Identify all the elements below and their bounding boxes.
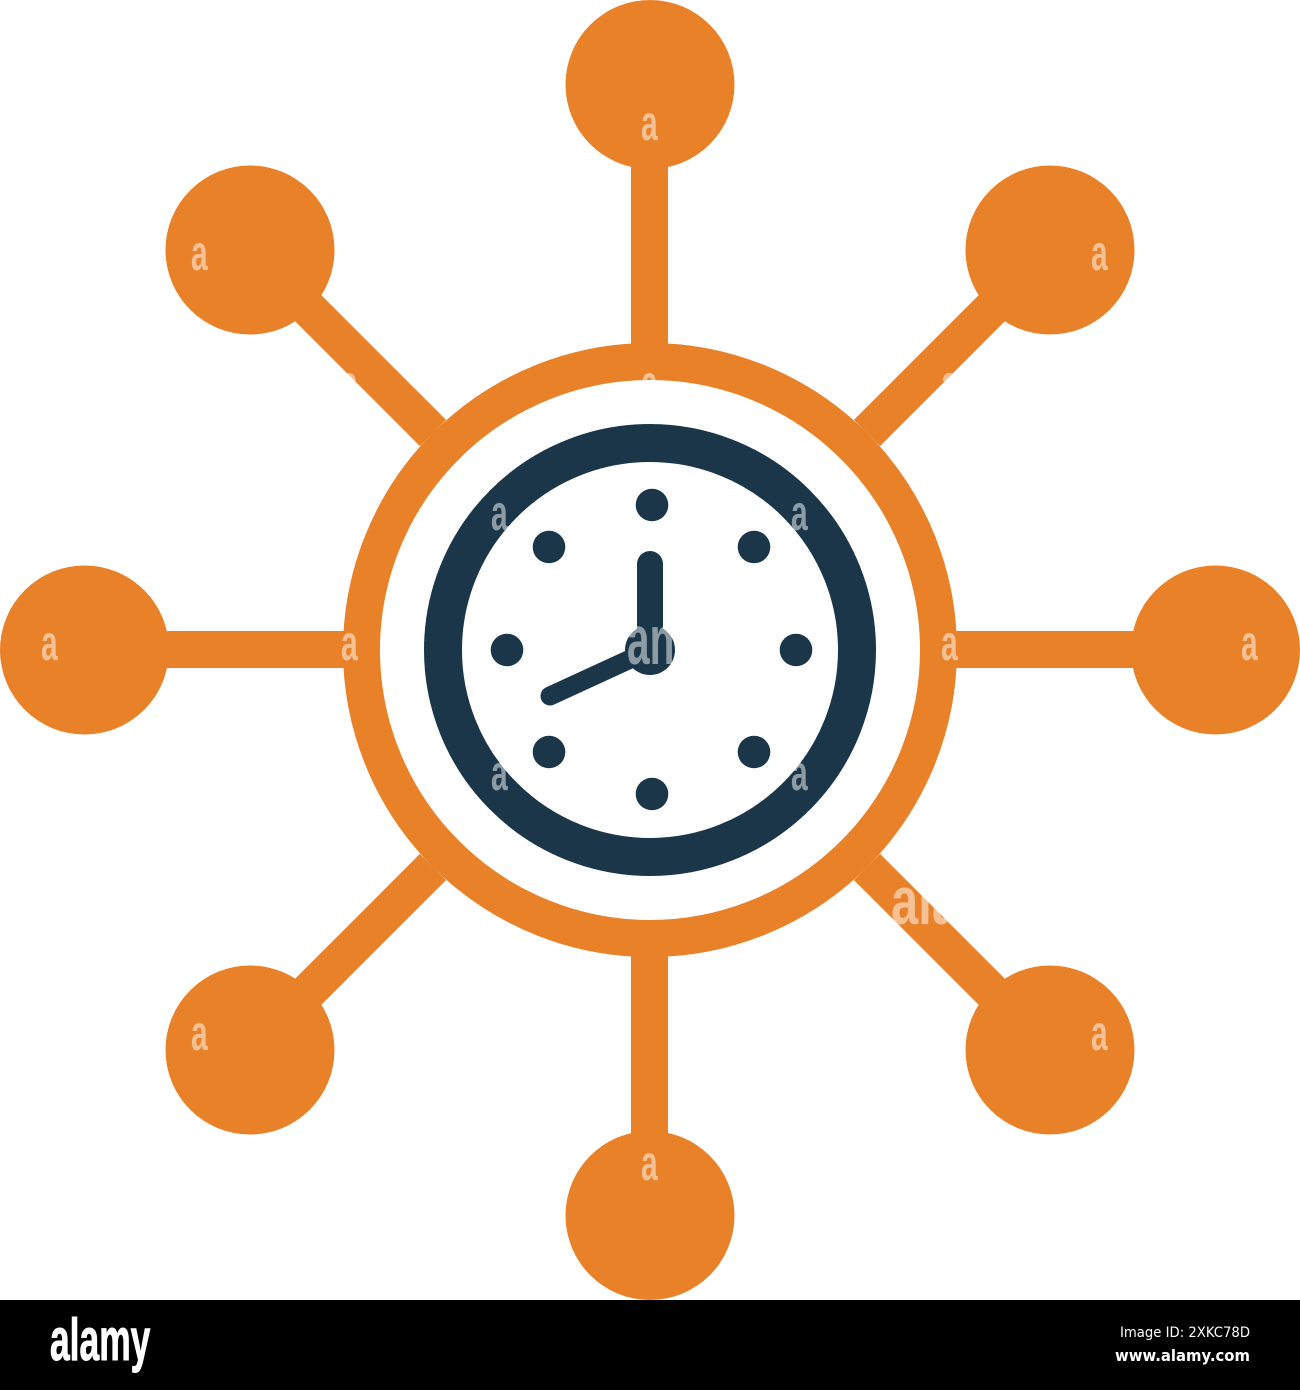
spoke and node: left <box>0 566 355 734</box>
watermark glyphs: a <box>491 485 508 541</box>
website: www.alamy.com <box>1115 1346 1250 1365</box>
outer ring <box>362 362 938 938</box>
watermark glyphs: a <box>791 485 808 541</box>
spoke and node: right <box>945 566 1300 734</box>
watermark glyphs: a <box>791 745 808 801</box>
clock hands <box>550 564 650 696</box>
spoke and node: bottom left <box>166 867 433 1134</box>
spoke and node: top left <box>166 166 433 433</box>
clock hub <box>625 625 675 675</box>
watermark glyphs: a <box>191 225 208 281</box>
watermark glyphs: a <box>641 1135 658 1191</box>
watermark glyphs: a <box>1091 1005 1108 1061</box>
watermark glyphs: ala <box>891 862 960 939</box>
spoke and node: bottom <box>566 945 734 1300</box>
watermark glyphs: a <box>341 355 358 411</box>
watermark glyphs: a <box>191 1005 208 1061</box>
spoke and node: top right <box>867 166 1134 433</box>
clock rim <box>443 443 857 857</box>
footer bar <box>0 1300 1300 1390</box>
spoke and node: bottom right <box>867 867 1134 1134</box>
watermark glyphs: a <box>1241 615 1258 671</box>
watermark glyphs: an <box>627 602 674 680</box>
clock icon <box>443 443 857 857</box>
watermark glyphs: a <box>41 615 58 671</box>
footer logo: alamy <box>50 1308 150 1373</box>
spoke and node: top <box>566 0 734 355</box>
watermark glyphs: a <box>1091 225 1108 281</box>
image id: Image ID: 2XKC78D <box>1120 1325 1250 1341</box>
watermark glyphs: a <box>491 745 508 801</box>
watermark glyphs <box>41 95 1258 1191</box>
watermark glyphs: a <box>341 615 358 671</box>
watermark glyphs: a <box>941 355 958 411</box>
watermark glyphs: a <box>641 355 658 411</box>
hour dots <box>491 489 812 810</box>
watermark glyphs: a <box>641 95 658 151</box>
watermark glyphs: a <box>941 615 958 671</box>
